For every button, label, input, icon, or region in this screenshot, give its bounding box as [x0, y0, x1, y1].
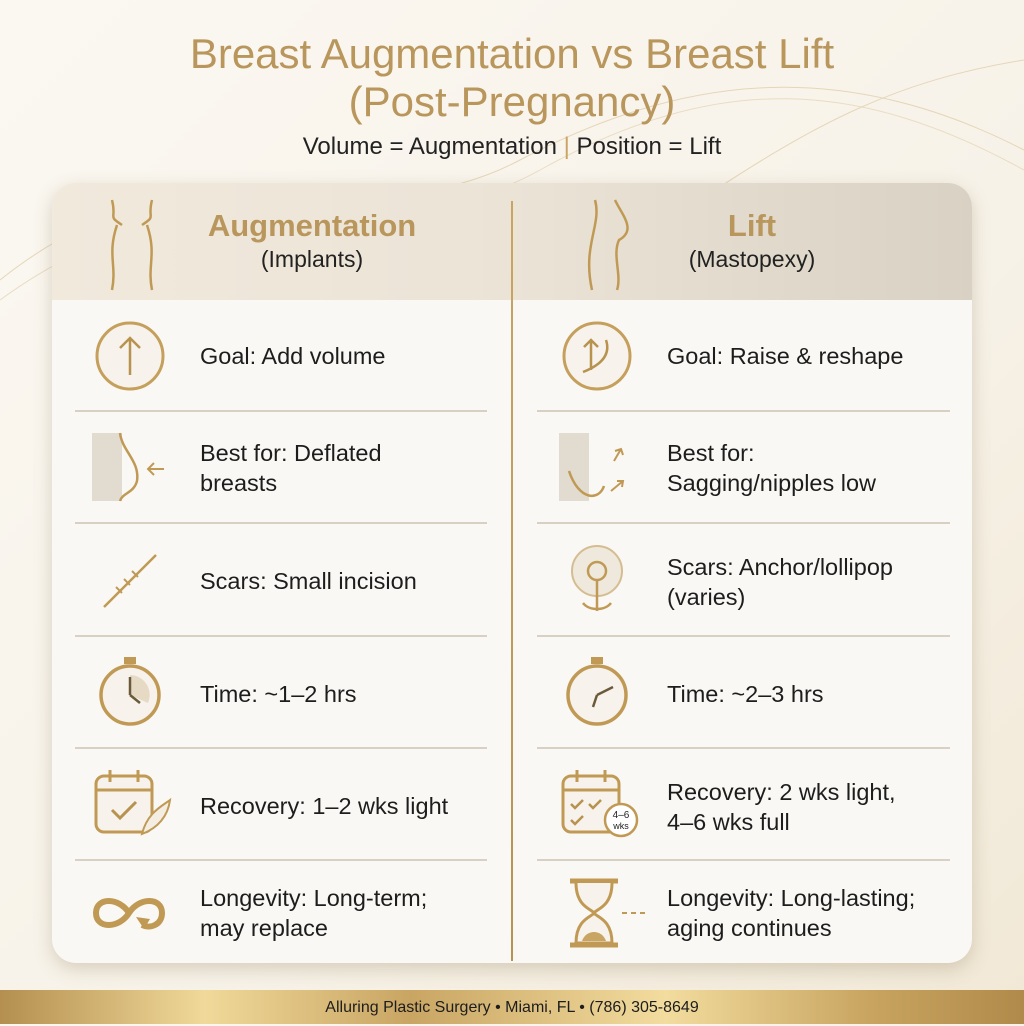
divider	[511, 201, 513, 961]
heading: augmentation: (Implants)	[261, 246, 363, 272]
icon: incision	[103, 554, 157, 608]
text: longevity lift: aging continues	[667, 915, 832, 941]
icon: calendar badge: 4–6	[613, 810, 630, 821]
text: longevity aug: Longevity: Long-term;	[200, 885, 427, 911]
text: scars lift	[667, 554, 893, 610]
text: recovery aug: Recovery: 1–2 wks light	[200, 793, 448, 819]
icon: calendar badge	[562, 770, 638, 838]
icon: lift circle	[562, 322, 632, 390]
icon: breast lift profile	[559, 433, 624, 501]
text: longevity aug: may replace	[200, 915, 328, 941]
separators	[75, 410, 487, 412]
text: best for aug	[200, 440, 382, 496]
icon: calendar leaf	[94, 770, 172, 836]
heading: augmentation	[208, 208, 416, 272]
panel: comparison card	[52, 183, 972, 963]
icon: stopwatch aug	[99, 657, 161, 726]
heading: lift: (Mastopexy)	[689, 246, 815, 272]
footer band	[0, 990, 1024, 1024]
text: best for aug: Best for: Deflated	[200, 440, 382, 466]
heading: lift: Lift	[728, 208, 776, 243]
icon: torso side	[588, 200, 629, 290]
text: longevity lift: Longevity: Long-lasting;	[667, 885, 915, 911]
text: longevity lift	[667, 885, 915, 941]
icon: anchor scar	[571, 545, 623, 611]
icon: up arrow circle	[96, 322, 164, 390]
icon: torso front	[110, 200, 154, 290]
icon: breast profile	[92, 432, 164, 502]
text: best for lift	[667, 440, 876, 496]
text: time lift: Time: ~2–3 hrs	[667, 681, 824, 707]
text: scars lift: Scars: Anchor/lollipop	[667, 554, 893, 580]
text: recovery lift	[667, 779, 896, 835]
title: Breast Augmentation vs Breast Lift	[190, 30, 834, 77]
icon: infinity arrow	[93, 898, 165, 930]
icon: stopwatch lift	[566, 657, 628, 726]
subtitle: Volume = Augmentation | Position = Lift	[303, 133, 721, 160]
text: scars lift: (varies)	[667, 584, 745, 610]
title	[190, 30, 834, 125]
text: goal lift: Goal: Raise & reshape	[667, 343, 903, 369]
text: best for lift: Best for:	[667, 440, 755, 466]
text: best for lift: Sagging/nipples low	[667, 470, 876, 496]
text: time aug: Time: ~1–2 hrs	[200, 681, 357, 707]
icon: calendar badge: wks	[612, 821, 629, 831]
header band	[52, 183, 972, 300]
heading: lift	[689, 208, 815, 272]
text: recovery lift: 4–6 wks full	[667, 809, 790, 835]
icon: hourglass	[570, 878, 645, 948]
background waves	[0, 60, 1024, 300]
text: recovery lift: Recovery: 2 wks light,	[667, 779, 896, 805]
heading: augmentation: Augmentation	[208, 208, 416, 243]
text: scars aug: Scars: Small incision	[200, 568, 417, 594]
footer band: Alluring Plastic Surgery • Miami, FL • (786) 305-8649	[325, 999, 699, 1016]
title: (Post-Pregnancy)	[349, 78, 675, 125]
text: best for aug: breasts	[200, 470, 277, 496]
text: goal aug: Goal: Add volume	[200, 343, 386, 369]
text: longevity aug	[200, 885, 427, 941]
